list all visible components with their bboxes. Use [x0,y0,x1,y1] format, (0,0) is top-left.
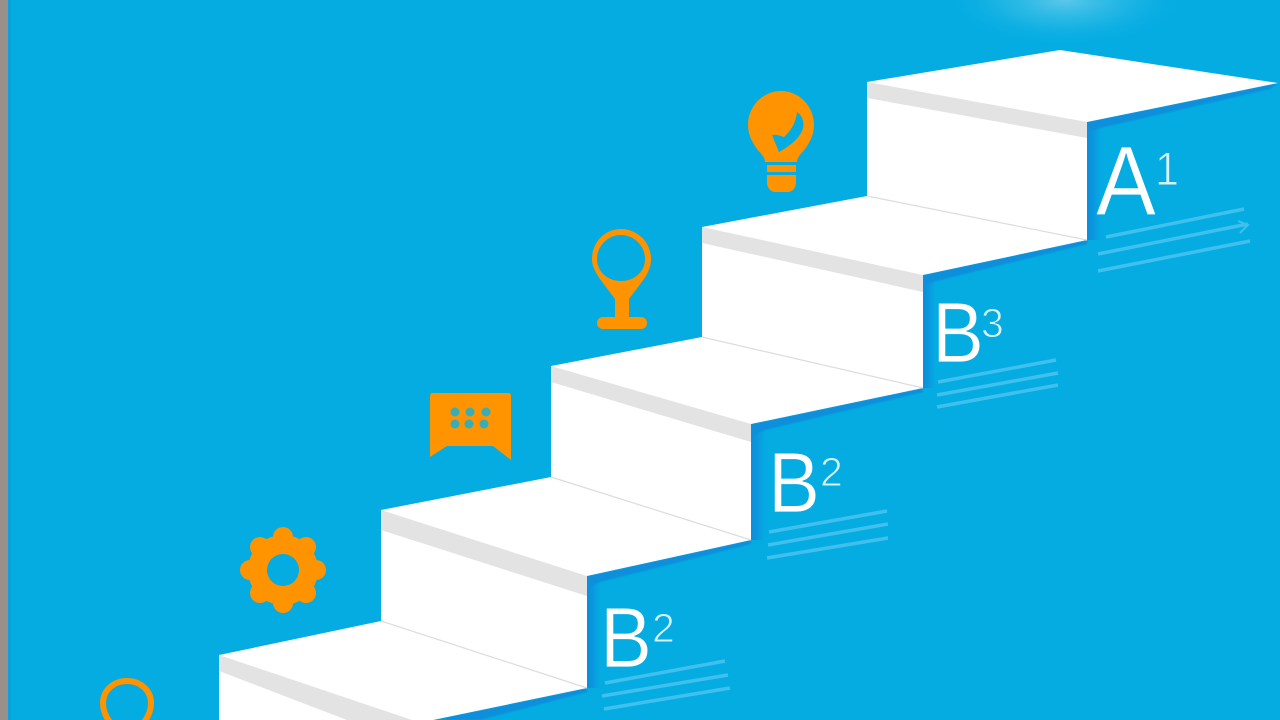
description lines [602,661,730,709]
label B2 upper: B [768,436,820,531]
left edge strip [0,0,8,720]
label B3: B [932,286,984,381]
step 3: B2 [551,337,923,558]
icon: chat bubble [430,393,511,460]
step 4: B2 [381,477,751,709]
step 1 top: A1 [867,50,1278,271]
label B2 lower: 2 [652,605,675,651]
label B2 upper: 2 [820,449,843,495]
icon: location pin partial [103,681,151,720]
label B3: 3 [981,300,1004,346]
top glow [940,0,1190,48]
icon: location pin [592,229,651,329]
label B2 lower: B [600,591,652,686]
icon: lightbulb [748,91,814,192]
description lines [1098,209,1250,271]
left edge shade [8,0,11,720]
label A1: 1 [1155,142,1179,195]
step 2: B3 [702,196,1087,407]
icon: gear [248,535,318,605]
description lines [767,511,888,558]
step 5 [219,621,587,720]
description lines [937,360,1058,407]
label A1: A [1096,126,1157,236]
